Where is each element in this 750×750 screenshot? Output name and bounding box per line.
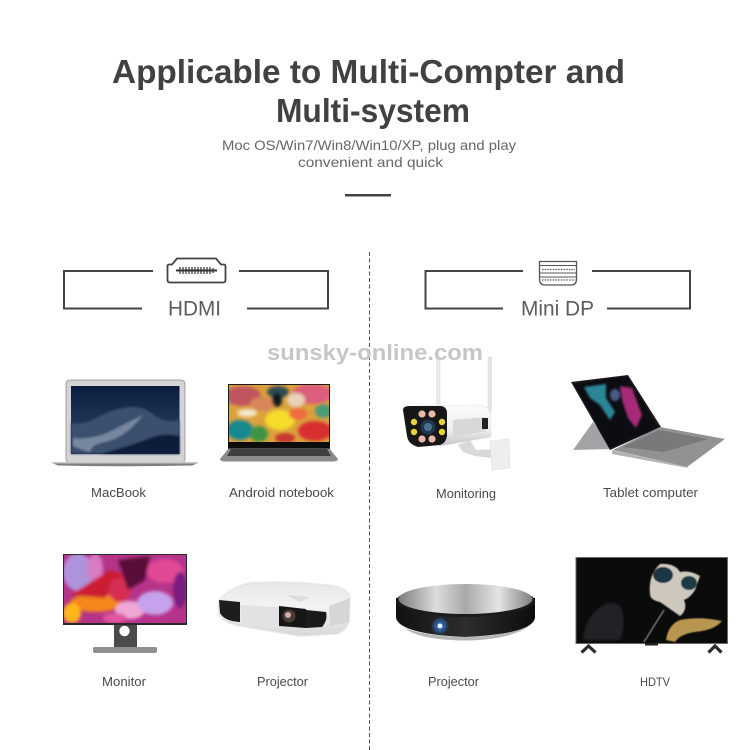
label: Android notebook: Android notebook — [229, 485, 335, 500]
label: HDTV: HDTV — [640, 675, 670, 689]
device: Projector (round) — [396, 584, 535, 640]
device: HDTV — [576, 558, 728, 652]
device: Monitor — [63, 553, 187, 653]
device: Android notebook — [220, 384, 338, 462]
title: Applicable to Multi-Compter and — [112, 53, 625, 90]
subtitle: convenient and quick — [298, 154, 444, 170]
label: Monitor: Monitor — [102, 674, 147, 689]
title — [112, 53, 625, 129]
label: Mini DP: Mini DP — [521, 298, 594, 320]
label: Projector (round): Projector — [428, 674, 480, 689]
label: Monitoring: Monitoring — [436, 486, 496, 501]
subtitle — [222, 137, 516, 170]
label: Projector (left): Projector — [257, 674, 309, 689]
icon: HDMI connector — [168, 258, 226, 282]
icon: Mini DP connector — [540, 262, 576, 285]
watermark: sunsky-online.com — [267, 340, 483, 365]
panel: Mini DP header — [426, 262, 690, 320]
subtitle: Moc OS/Win7/Win8/Win10/XP, plug and play — [222, 137, 516, 153]
device: Monitoring camera — [403, 357, 510, 470]
panel: HDMI header — [64, 258, 328, 320]
label: MacBook: MacBook — [91, 485, 146, 500]
label: Tablet computer: Tablet computer — [603, 485, 699, 500]
device: Projector (left) — [218, 582, 350, 636]
device: Tablet computer — [570, 375, 725, 468]
title: Multi-system — [276, 92, 470, 129]
device: MacBook — [52, 380, 198, 466]
label: HDMI: HDMI — [168, 298, 221, 320]
